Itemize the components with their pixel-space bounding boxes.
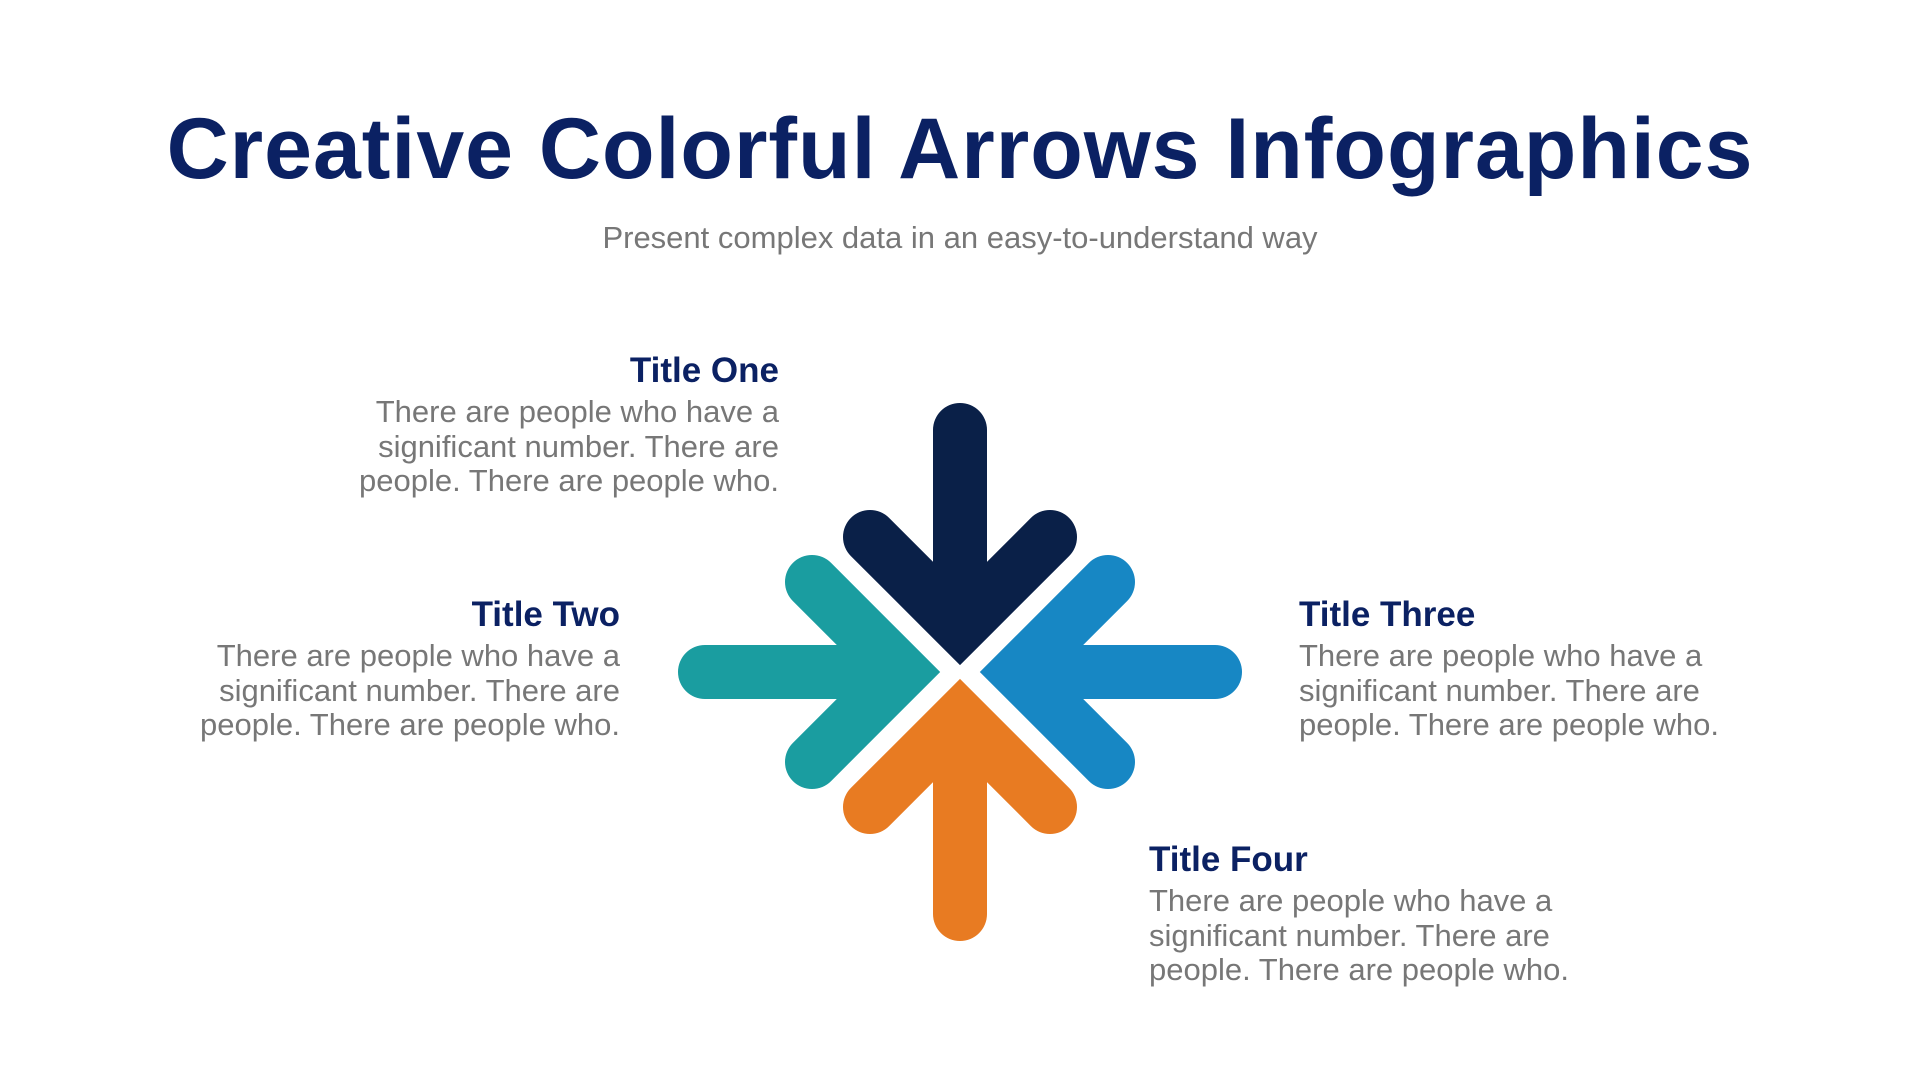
arrow: teal pointing right [705, 582, 902, 762]
text block: Title Two: There are people who have a [217, 638, 620, 673]
text block: Title Three [1299, 595, 1719, 742]
arrow: orange pointing up [870, 717, 1050, 914]
text block: Title Two: people. There are people who. [200, 707, 620, 742]
title: Creative Colorful Arrows Infographics [167, 101, 1753, 197]
text block: Title Four [1149, 840, 1569, 987]
text block: Title One: people. There are people who. [359, 463, 779, 498]
text block: Title Two [200, 595, 620, 742]
arrow: navy pointing down [870, 430, 1050, 627]
text block: Title Four: Title Four [1149, 840, 1308, 879]
text block: Title One: significant number. There are [378, 428, 779, 464]
subtitle: Present complex data in an easy-to-understand way [602, 220, 1318, 255]
text block: Title Three: Title Three [1299, 595, 1475, 634]
text block: Title One: There are people who have a [376, 394, 779, 429]
text block: Title One: Title One [630, 351, 779, 390]
text block: Title Four: significant number. There are [1149, 918, 1550, 952]
text block: Title Three: people. There are people who. [1299, 707, 1719, 742]
text block: Title Four: people. There are people who. [1149, 952, 1569, 987]
text block: Title One [359, 351, 779, 498]
arrow: blue pointing left [1018, 582, 1215, 762]
text block: Title Two: significant number. There are [219, 672, 620, 708]
text block: Title Four: There are people who have a [1149, 883, 1552, 918]
text block: Title Three: There are people who have a [1299, 638, 1702, 673]
text block: Title Two: Title Two [472, 595, 620, 634]
text block: Title Three: significant number. There are [1299, 672, 1700, 708]
